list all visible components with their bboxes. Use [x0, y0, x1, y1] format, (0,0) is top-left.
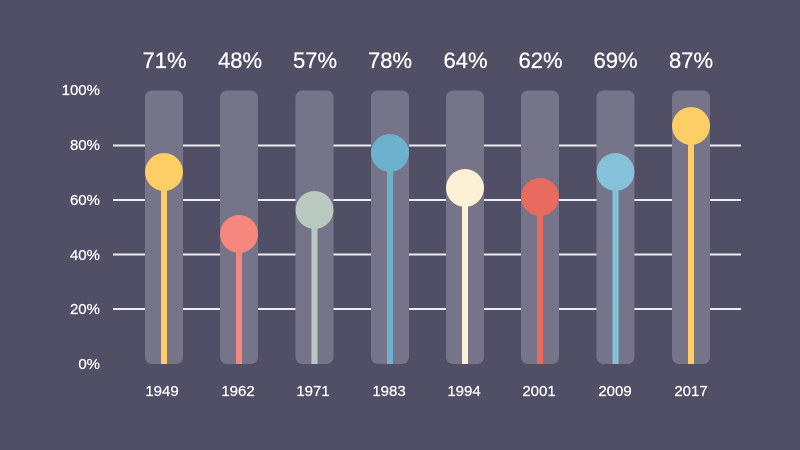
- year labels: 1983: [372, 383, 406, 400]
- lollipop 2017: [672, 107, 710, 364]
- lollipop 1962: [220, 215, 258, 364]
- top percentage labels: 64%: [443, 48, 488, 73]
- y-axis labels: 100%: [62, 82, 100, 99]
- year labels: 2017: [674, 383, 708, 400]
- top percentage labels: 62%: [518, 48, 563, 73]
- y-axis labels: 40%: [70, 247, 100, 264]
- top percentage labels: 78%: [368, 48, 412, 73]
- lollipop 2009: [596, 153, 634, 364]
- lollipop 1971: [296, 191, 334, 364]
- lollipop 1994: [446, 169, 484, 364]
- y-axis labels: 20%: [70, 301, 100, 318]
- top percentage labels: 87%: [669, 48, 713, 73]
- lollipop 1983: [371, 134, 409, 364]
- year labels: 1949: [145, 383, 179, 400]
- lollipop 2001: [521, 178, 559, 364]
- y-axis labels: 0%: [78, 356, 100, 373]
- year labels: [145, 383, 708, 400]
- column tracks: [145, 90, 710, 364]
- year labels: 2001: [522, 383, 556, 400]
- top percentage labels: [142, 48, 713, 73]
- top percentage labels: 48%: [218, 48, 262, 73]
- year labels: 1971: [296, 383, 330, 400]
- y-axis labels: [62, 82, 100, 373]
- year labels: 2009: [598, 383, 632, 400]
- lollipop 1949: [145, 153, 183, 364]
- top percentage labels: 57%: [293, 48, 337, 73]
- year labels: 1994: [447, 383, 481, 400]
- year labels: 1962: [221, 383, 255, 400]
- top percentage labels: 69%: [593, 48, 638, 73]
- y-axis labels: 80%: [70, 137, 100, 154]
- top percentage labels: 71%: [142, 48, 187, 73]
- y-axis labels: 60%: [70, 192, 100, 209]
